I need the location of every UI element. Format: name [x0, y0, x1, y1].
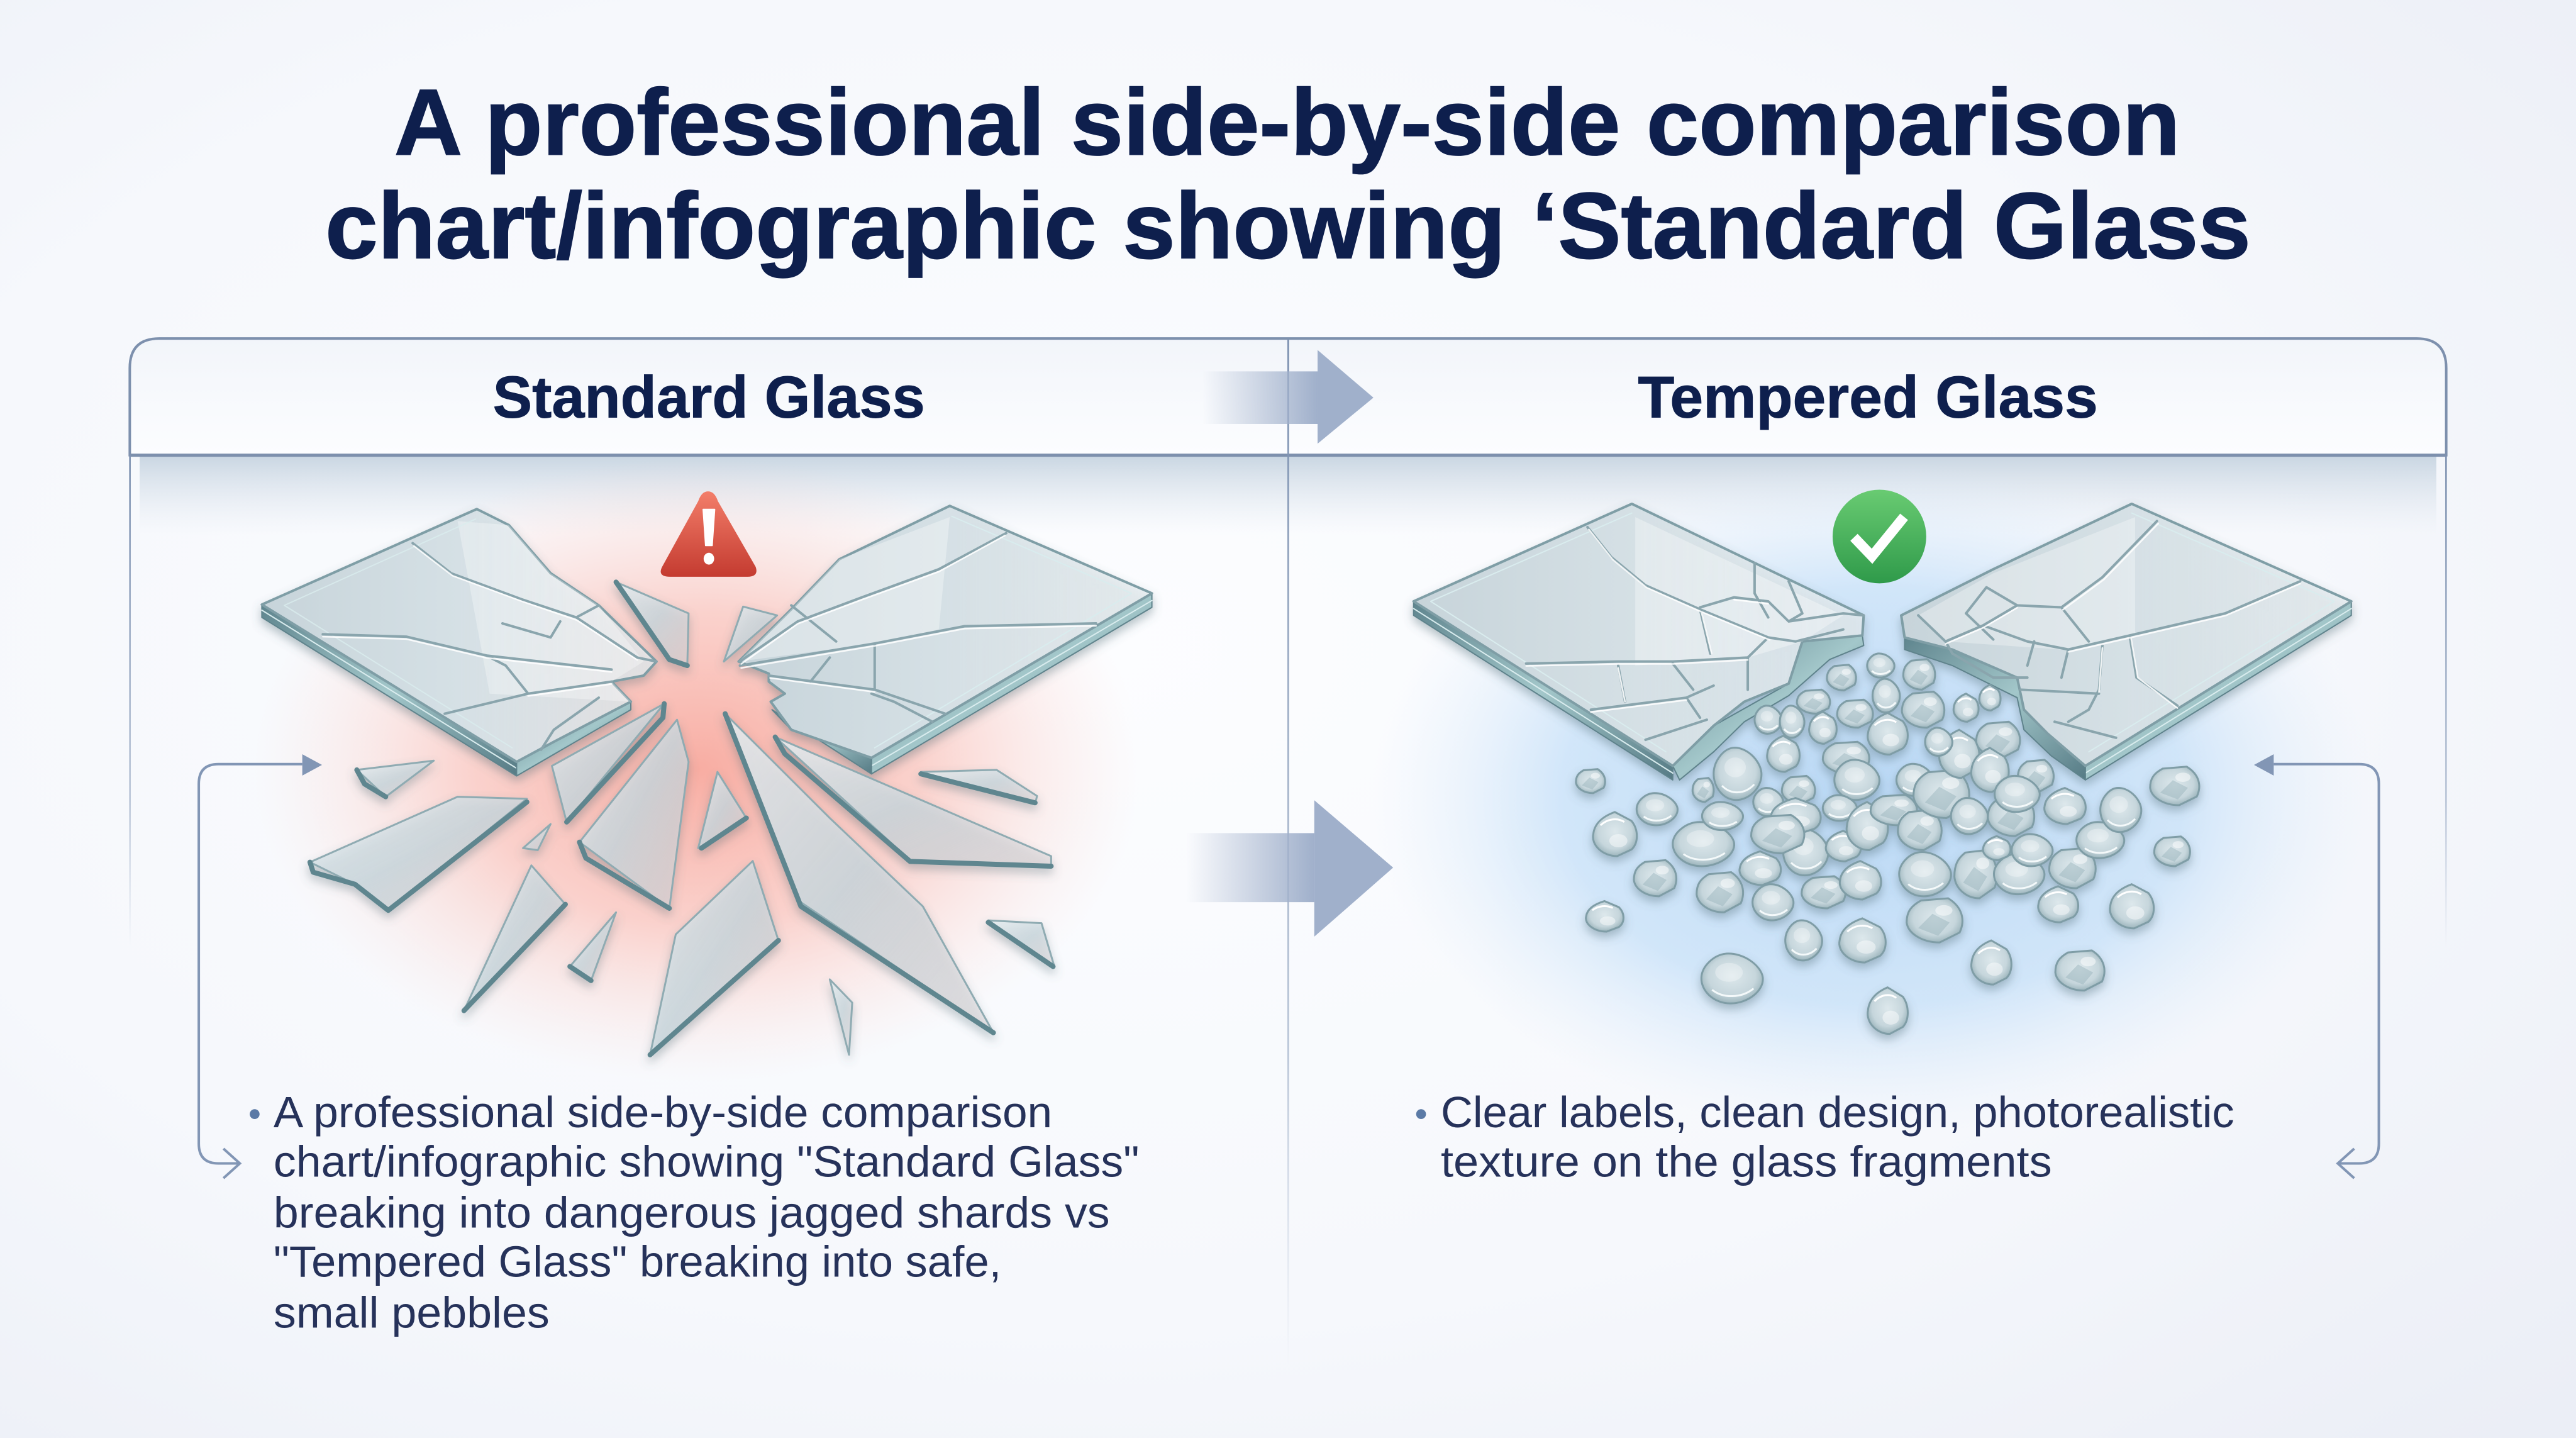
title — [325, 70, 2251, 278]
heading: Tempered Glass: Tempered Glass — [1638, 364, 2098, 430]
blue safety glow — [1372, 460, 2374, 1134]
icon: green check badge — [1833, 489, 1926, 583]
left broken pane — [262, 509, 657, 776]
shards — [310, 582, 1054, 1055]
icon: warning triangle — [661, 491, 757, 577]
right cracked pane — [1901, 504, 2351, 780]
glass pebbles — [1576, 654, 2199, 1034]
text block: standard glass description — [250, 1088, 1140, 1337]
standard glass illustration: jagged shards — [262, 506, 1152, 1055]
text block: standard glass description: breaking into dangerous jagged shards vs — [274, 1188, 1110, 1237]
text block: tempered glass description: texture on the glass fragments — [1441, 1137, 2052, 1186]
red impact glow — [255, 457, 1142, 1081]
text block: standard glass description: A professional side-by-side comparison — [274, 1088, 1052, 1137]
text block: tempered glass description — [1416, 1088, 2235, 1186]
tempered glass illustration: safe pebbles — [1414, 504, 2351, 1034]
connector arrow: right — [2254, 754, 2379, 1178]
text block: standard glass description: chart/infographic showing "Standard Glass" — [274, 1137, 1140, 1186]
arrow: middle — [1186, 800, 1393, 937]
title: A professional side-by-side comparison — [394, 70, 2180, 175]
text block: tempered glass description: Clear labels, clean design, photorealistic — [1441, 1088, 2235, 1137]
right broken pane — [738, 506, 1152, 774]
text block: standard glass description: small pebbles — [274, 1288, 550, 1337]
text block: standard glass description: "Tempered Glass" breaking into safe, — [274, 1237, 1001, 1286]
arrow: header — [1202, 350, 1374, 443]
title: chart/infographic showing ‘Standard Glass — [325, 173, 2251, 278]
heading: Standard Glass: Standard Glass — [493, 364, 925, 430]
connector arrow: left — [199, 754, 322, 1178]
panel: comparison frame — [129, 338, 2447, 1366]
left cracked pane — [1414, 504, 1863, 780]
